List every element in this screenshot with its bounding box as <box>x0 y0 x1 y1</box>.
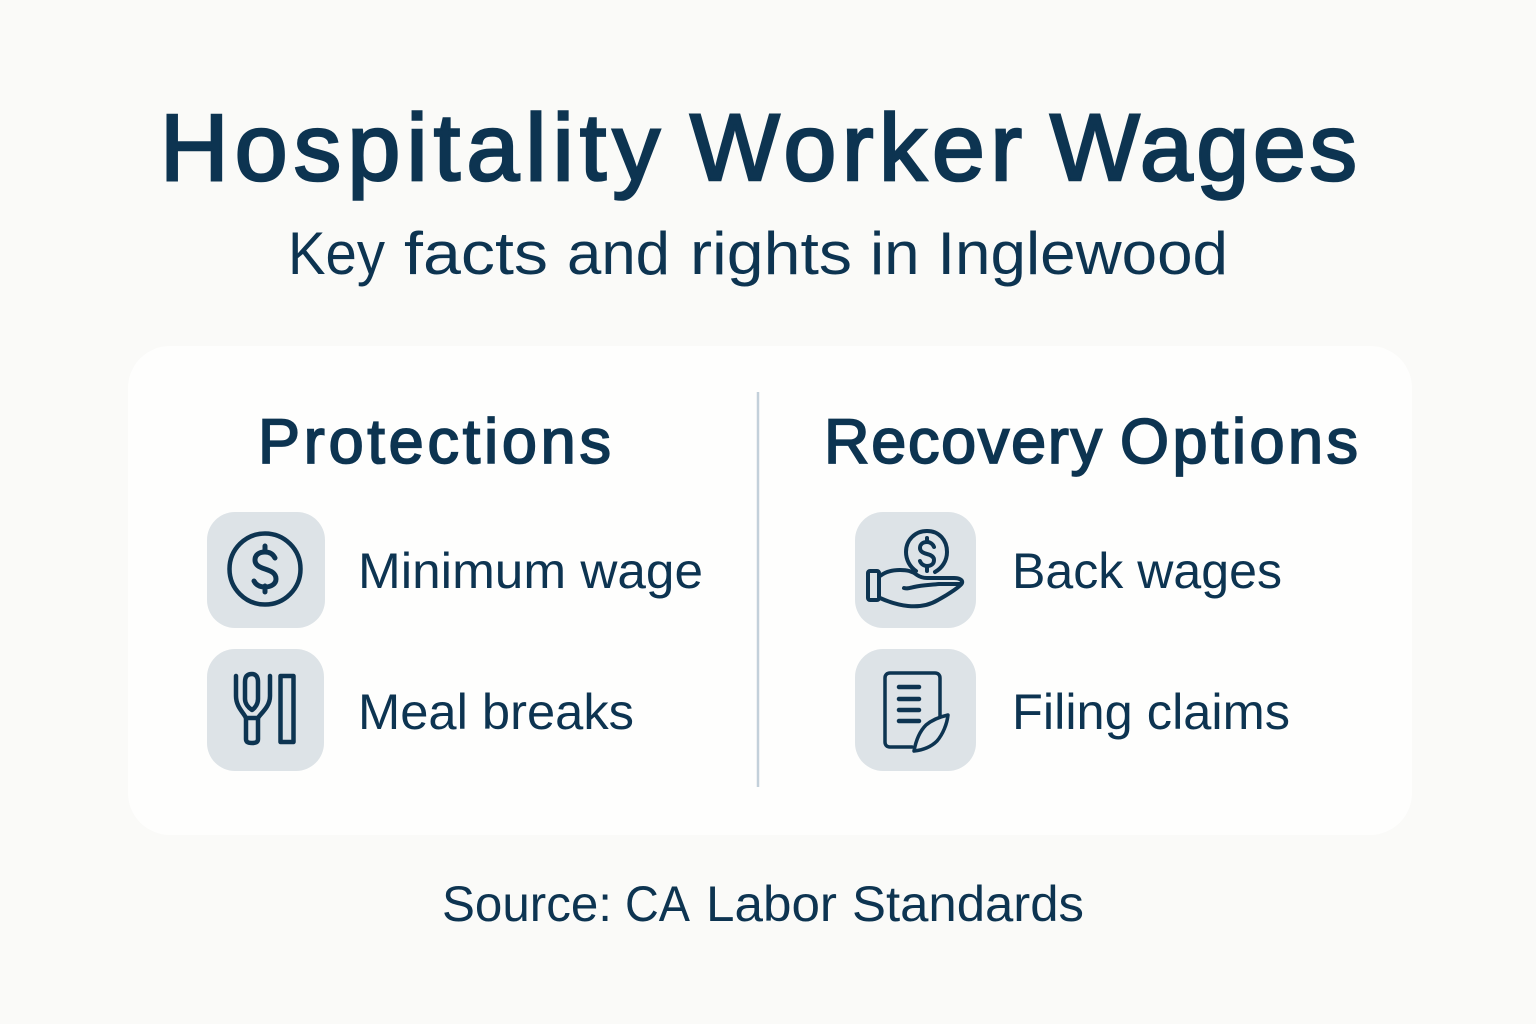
subtitle: in Inglewood <box>870 220 1228 287</box>
heading: recovery options <box>824 407 1358 477</box>
title <box>160 95 1357 201</box>
label: filing claims: Filing claims <box>1012 684 1290 740</box>
source note: Source: <box>442 876 612 932</box>
subtitle: rights <box>690 220 852 287</box>
subtitle: Key <box>288 220 385 287</box>
icon: dollar coin <box>207 512 325 628</box>
subtitle: and <box>567 220 670 287</box>
subtitle: facts <box>404 220 548 287</box>
icon: document with quill <box>855 649 976 771</box>
source note: Standards <box>852 876 1084 932</box>
label: meal breaks: Meal breaks <box>358 684 634 740</box>
source note: CA <box>625 876 691 932</box>
panel: recovery options <box>824 407 1358 771</box>
title: Worker <box>690 95 1022 201</box>
heading: recovery options: Recovery <box>824 407 1102 477</box>
label: minimum wage: Minimum wage <box>358 543 703 599</box>
heading: recovery options: Options <box>1120 407 1358 477</box>
source note: Labor <box>706 876 837 932</box>
icon: hand with coin <box>855 512 976 628</box>
source note <box>442 876 1084 932</box>
label: back wages: Back wages <box>1012 543 1282 599</box>
title: Wages <box>1050 95 1357 201</box>
panel: protections <box>207 407 703 771</box>
heading: protections: Protections <box>258 407 611 477</box>
title: Hospitality <box>160 95 660 201</box>
icon: fork and knife <box>207 649 324 771</box>
panel: main card <box>128 346 1412 835</box>
subtitle <box>288 220 1228 287</box>
